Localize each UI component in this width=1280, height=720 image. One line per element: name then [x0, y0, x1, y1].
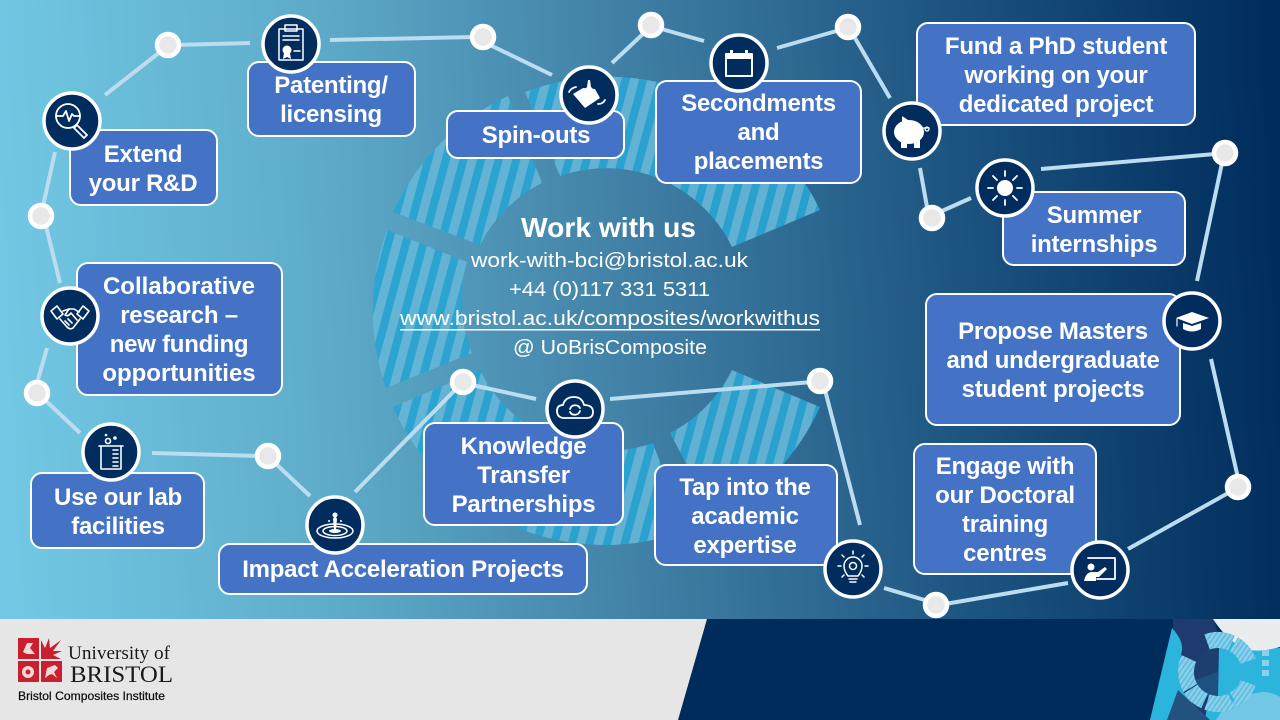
- box: Tap into the academic expertise: expertise: [693, 532, 797, 559]
- box: Knowledge Transfer Partnerships: Knowledge: [461, 433, 586, 460]
- box: Knowledge Transfer Partnerships: Transfer: [477, 462, 570, 489]
- institute name: Bristol Composites Institute: [18, 689, 165, 703]
- box: Engage with our Doctoral training centres: [914, 444, 1096, 574]
- box: Propose Masters and undergraduate student projects: [926, 294, 1180, 425]
- box: Use our lab facilities: facilities: [71, 513, 165, 540]
- path nodes: [26, 14, 1249, 616]
- box: Use our lab facilities: Use our lab: [54, 484, 182, 511]
- box: Engage with our Doctoral training centres: Engage with: [936, 453, 1074, 480]
- box: Collaborative research: opportunities: [102, 360, 256, 387]
- logo shield: [18, 638, 62, 682]
- box: Summer internships: [1003, 192, 1185, 265]
- box: Spin-outs: [447, 111, 624, 158]
- box: Engage with our Doctoral training centres: training: [962, 511, 1048, 538]
- footer navy panel: [678, 619, 1280, 720]
- striped ring graphic: [373, 77, 820, 545]
- icon: magnifier with pulse: [44, 93, 100, 149]
- box: Fund a PhD student: Fund a PhD student: [945, 33, 1167, 60]
- box: Collaborative research: research –: [120, 302, 238, 329]
- logo wordmark BRISTOL: BRISTOL: [70, 662, 173, 687]
- icon: teacher at board: [1072, 542, 1128, 598]
- box: Extend your R&D: your R&D: [89, 170, 197, 197]
- box: Fund a PhD student: working on your: [964, 62, 1147, 89]
- central contact block: [399, 212, 820, 359]
- box: Impact Acceleration Projects: [219, 544, 587, 594]
- footer corner graphic: [1150, 619, 1280, 720]
- footer light panel: [0, 619, 708, 720]
- University of Bristol logo: [18, 638, 173, 703]
- icon: beaker: [83, 424, 139, 480]
- central contact block: www.bristol.ac.uk/composites/workwithus: [399, 308, 820, 330]
- box: Summer internships: Summer: [1047, 202, 1141, 229]
- box: Collaborative research: Collaborative: [103, 273, 255, 300]
- central contact block: work-with-bci@bristol.ac.uk: [470, 250, 749, 272]
- central contact block: @ UoBrisComposite: [513, 337, 707, 359]
- box: Extend your R&D: Extend: [104, 141, 182, 168]
- icon: spinning top: [561, 67, 617, 123]
- logo wordmark: University of: [68, 643, 171, 664]
- box: Secondments and placements: placements: [694, 148, 823, 175]
- box: Knowledge Transfer Partnerships: Partnerships: [452, 491, 595, 518]
- box: Spin-outs: Spin-outs: [482, 122, 590, 149]
- icon: graduation cap: [1164, 293, 1220, 349]
- icon: water ripple: [307, 497, 363, 553]
- box: Knowledge Transfer Partnerships: [424, 423, 623, 525]
- box: Patenting/licensing: [248, 62, 415, 136]
- box: Engage with our Doctoral training centres: our Doctoral: [935, 482, 1075, 509]
- box: Tap into the academic expertise: academic: [691, 503, 799, 530]
- box: Secondments and placements: and: [738, 119, 779, 146]
- icon: cloud sync: [547, 381, 603, 437]
- box: Propose Masters and undergraduate student projects: Propose Masters: [958, 318, 1148, 345]
- box: Propose Masters and undergraduate student projects: student projects: [962, 376, 1144, 403]
- box: Patenting/licensing: Patenting/: [274, 72, 388, 99]
- icon: sun: [977, 160, 1033, 216]
- box: Extend your R&D: [70, 130, 217, 205]
- icon: patent clipboard: [263, 16, 319, 72]
- box: Fund a PhD student: [917, 23, 1195, 125]
- icon: piggy bank: [884, 103, 940, 159]
- box: Propose Masters and undergraduate student projects: and undergraduate: [946, 347, 1160, 374]
- icon: light bulb: [825, 541, 881, 597]
- icon: handshake: [42, 288, 98, 344]
- connecting path lines: [37, 28, 1238, 604]
- box: Summer internships: internships: [1031, 231, 1157, 258]
- box: Secondments and placements: Secondments: [681, 90, 836, 117]
- box: Patenting/licensing: licensing: [280, 101, 382, 128]
- box: Collaborative research: [77, 263, 282, 395]
- box: Tap into the academic expertise: Tap into the: [679, 474, 811, 501]
- box: Collaborative research: new funding: [110, 331, 248, 358]
- box: Fund a PhD student: dedicated project: [959, 91, 1153, 118]
- box: Tap into the academic expertise: [655, 465, 837, 565]
- box: Impact Acceleration Projects: Impact Acceleration Projects: [242, 556, 564, 583]
- box: Engage with our Doctoral training centres: centres: [963, 540, 1047, 567]
- box: Use our lab facilities: [31, 473, 204, 548]
- box: Secondments and placements: [656, 81, 861, 183]
- central contact block: +44 (0)117 331 5311: [509, 279, 710, 301]
- icon: calendar: [711, 35, 767, 91]
- central contact block: Work with us: [521, 212, 696, 243]
